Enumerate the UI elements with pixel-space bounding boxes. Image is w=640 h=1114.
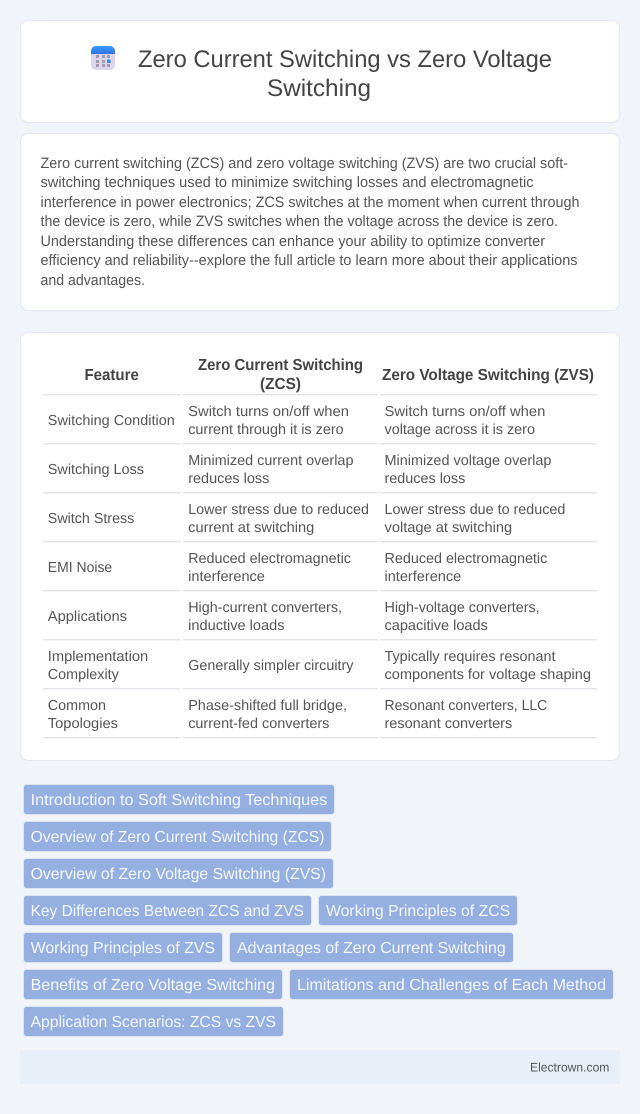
table row: switching loss: reduces loss xyxy=(188,471,269,487)
tag: limitations xyxy=(290,970,614,1000)
table row: applications xyxy=(43,600,597,640)
table row: implementation complexity: Typically requires resonant xyxy=(384,649,556,665)
tag: application scenarios: Application Scenarios: ZCS vs ZVS xyxy=(31,1014,276,1031)
tag: benefits zvs: Benefits of Zero Voltage Switching xyxy=(31,977,275,994)
table row: switching loss: Switching Loss xyxy=(48,462,144,478)
panel: introduction xyxy=(20,134,620,310)
tag: overview zvs xyxy=(24,858,334,888)
text block: introduction: Understanding these differences can enhance your ability to optimize converter xyxy=(40,233,545,250)
table header row: Feature xyxy=(84,367,139,384)
tag: application scenarios xyxy=(24,1006,284,1036)
table row: switching condition xyxy=(43,404,597,444)
table row: common topologies xyxy=(43,698,597,738)
tag list: table of contents xyxy=(24,784,614,1036)
tag: overview zcs: Overview of Zero Current Switching (ZCS) xyxy=(31,829,324,846)
tag: working principles zvs: Working Principles of ZVS xyxy=(31,940,215,957)
table row: implementation complexity: Generally simpler circuitry xyxy=(188,658,354,674)
table header row: (ZCS) xyxy=(260,376,301,393)
table row: switching condition: Switch turns on/off when xyxy=(384,404,545,420)
table header row xyxy=(43,357,597,395)
table row: implementation complexity xyxy=(43,649,597,689)
panel: comparison table xyxy=(20,332,620,760)
tag: advantages zcs xyxy=(230,932,514,962)
table row: applications: inductive loads xyxy=(188,618,284,634)
table row: switching condition: Switching Condition xyxy=(48,413,175,429)
table row: switching condition: voltage across it is zero xyxy=(384,422,535,438)
table row: implementation complexity: Complexity xyxy=(48,667,120,683)
table row: implementation complexity: components for voltage shaping xyxy=(384,667,591,683)
table row: switch stress: voltage at switching xyxy=(384,520,512,536)
table row: switching loss xyxy=(43,453,597,493)
tag: working principles zvs xyxy=(24,932,222,962)
footer xyxy=(20,1050,620,1084)
icon: calendar xyxy=(91,46,115,70)
table row: emi noise: EMI Noise xyxy=(48,560,112,576)
text block: introduction: efficiency and reliability--explore the full article to learn more about their applications xyxy=(40,252,578,269)
table row: switch stress xyxy=(43,502,597,542)
table row: switching loss: reduces loss xyxy=(384,471,465,487)
text block: introduction: interference in power electronics; ZCS switches at the moment when current through xyxy=(40,194,580,211)
tag: introduction: Introduction to Soft Switching Techniques xyxy=(31,792,327,809)
tag: working principles zcs xyxy=(318,896,518,926)
tag: advantages zcs: Advantages of Zero Current Switching xyxy=(237,940,506,957)
tag: overview zvs: Overview of Zero Voltage Switching (ZVS) xyxy=(31,866,326,883)
table row: switch stress: current at switching xyxy=(188,520,314,536)
table row: switching condition: current through it is zero xyxy=(188,422,344,438)
table row: emi noise: Reduced electromagnetic xyxy=(384,551,547,567)
table row: common topologies: Resonant converters, LLC xyxy=(384,698,547,714)
tag: key differences: Key Differences Between ZCS and ZVS xyxy=(31,903,304,920)
footer: Electrown.com xyxy=(530,1060,609,1074)
table header row: Zero Voltage Switching (ZVS) xyxy=(382,367,594,384)
table row: switch stress: Switch Stress xyxy=(48,511,134,527)
title: Zero Current Switching vs Zero Voltage xyxy=(138,46,552,73)
panel: header xyxy=(20,20,620,122)
text block: introduction: and advantages. xyxy=(40,272,145,289)
tag: introduction xyxy=(24,784,334,814)
table row: applications: Applications xyxy=(48,609,127,625)
table row: applications: High-current converters, xyxy=(188,600,342,616)
tag: limitations: Limitations and Challenges of Each Method xyxy=(297,977,606,994)
text block: introduction: the device is zero, while ZVS switches when the voltage across the device is zero. xyxy=(40,213,558,230)
table row: emi noise: Reduced electromagnetic xyxy=(188,551,351,567)
table row: emi noise: interference xyxy=(188,569,265,585)
table row: common topologies: current-fed converters xyxy=(188,716,329,732)
table row: switching condition: Switch turns on/off when xyxy=(188,404,349,420)
tag: benefits zvs xyxy=(24,970,282,1000)
text block: introduction: switching techniques used to minimize switching losses and electromagnetic xyxy=(40,174,534,191)
table row: emi noise xyxy=(43,551,597,591)
table row: switch stress: Lower stress due to reduced xyxy=(188,502,369,518)
table row: common topologies: resonant converters xyxy=(384,716,512,732)
title: Switching xyxy=(267,75,371,102)
table row: common topologies: Phase-shifted full bridge, xyxy=(188,698,347,714)
text block: introduction: Zero current switching (ZCS) and zero voltage switching (ZVS) are two crucial soft- xyxy=(40,155,568,172)
table row: applications: High-voltage converters, xyxy=(384,600,540,616)
table row: emi noise: interference xyxy=(384,569,461,585)
table row: switching loss: Minimized voltage overlap xyxy=(384,453,551,469)
tag: working principles zcs: Working Principles of ZCS xyxy=(326,903,510,920)
tag: key differences xyxy=(24,896,312,926)
table header row: Zero Current Switching xyxy=(198,357,363,374)
tag: overview zcs xyxy=(24,822,332,852)
table row: switching loss: Minimized current overlap xyxy=(188,453,354,469)
table row: common topologies: Common xyxy=(48,698,106,714)
table row: applications: capacitive loads xyxy=(384,618,488,634)
table row: implementation complexity: Implementation xyxy=(48,649,148,665)
table row: switch stress: Lower stress due to reduced xyxy=(384,502,565,518)
table row: common topologies: Topologies xyxy=(48,716,118,732)
